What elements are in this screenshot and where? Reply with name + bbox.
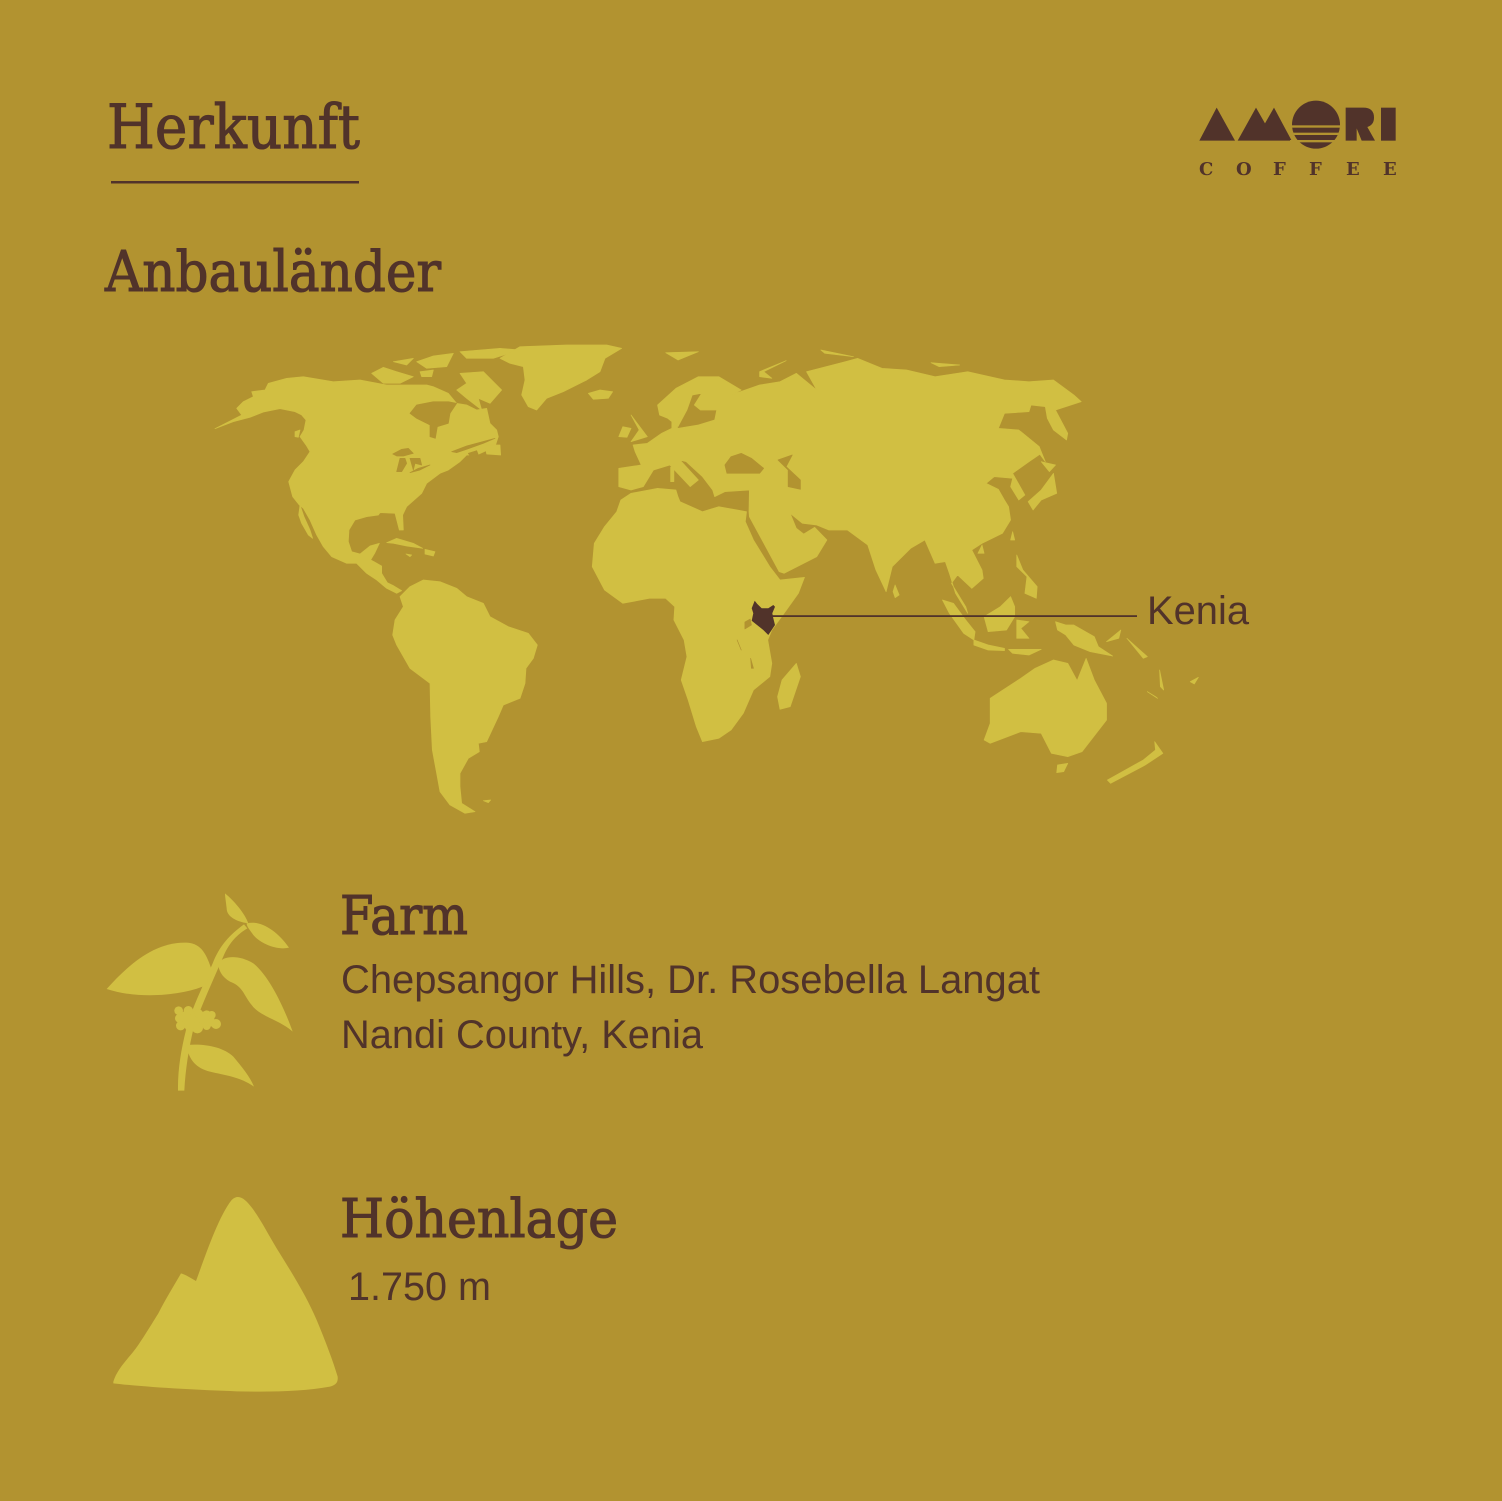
callout line to Kenia (771, 615, 1137, 617)
afro-eurasia and oceania (592, 350, 1198, 783)
subheading: Anbauländer: Anbauländer (104, 240, 441, 305)
label: Kenia: Kenia (1147, 589, 1250, 633)
heading: Höhenlage: Höhenlage (340, 1189, 618, 1250)
text: farm details: Chepsangor Hills, Dr. Rosebella Langat (341, 958, 1040, 1002)
title: Herkunft (107, 92, 360, 163)
heading: Farm: Farm (340, 886, 468, 947)
icon: coffee branch (107, 893, 293, 1091)
logo: Amori Coffee: COFFEE (1199, 159, 1397, 180)
icon: mountain (113, 1197, 338, 1392)
americas (215, 345, 622, 813)
logo: Amori Coffee (1199, 101, 1397, 180)
text: farm details (341, 958, 1040, 1057)
icon: Kenya highlighted (752, 601, 775, 635)
text: altitude: 1.750 m (348, 1265, 491, 1309)
world map (215, 345, 1198, 813)
text: farm details: Nandi County, Kenia (341, 1013, 704, 1057)
